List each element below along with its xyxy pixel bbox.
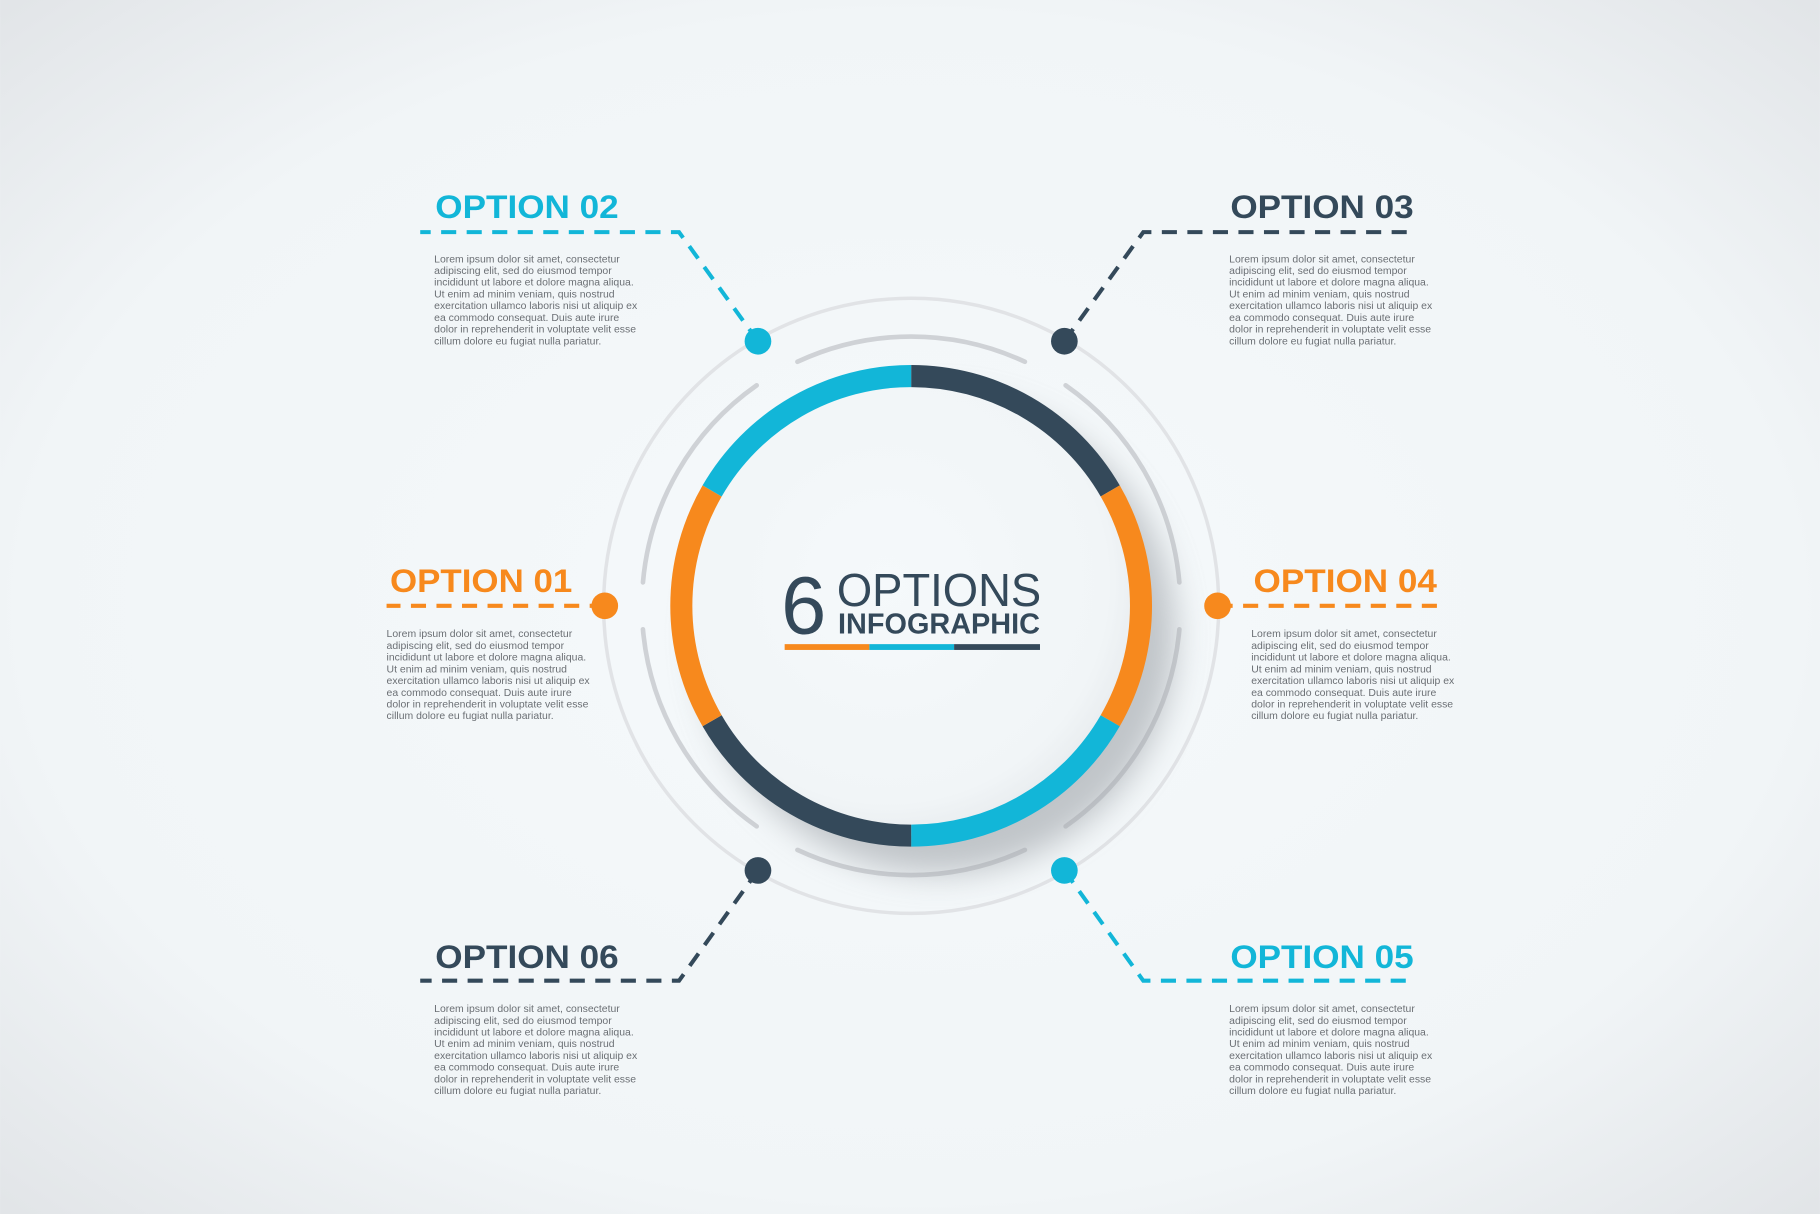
option 01: Ut enim ad minim veniam, quis nostrud: [387, 664, 567, 675]
option 02: [434, 189, 638, 347]
center title: INFOGRAPHIC: [838, 609, 1040, 641]
option 04: cillum dolore eu fugiat nulla pariatur.: [1251, 711, 1418, 722]
option 05: Lorem ipsum dolor sit amet, consectetur: [1229, 1004, 1415, 1015]
center title: OPTIONS: [837, 564, 1041, 616]
option 06: Lorem ipsum dolor sit amet, consectetur: [434, 1004, 620, 1015]
option 06: incididunt ut labore et dolore magna aliqua.: [434, 1027, 634, 1038]
option 04: adipiscing elit, sed do eiusmod tempor: [1251, 641, 1429, 652]
option 06: Ut enim ad minim veniam, quis nostrud: [434, 1039, 615, 1050]
option 01: Lorem ipsum dolor sit amet, consectetur: [387, 629, 573, 640]
option 03: cillum dolore eu fugiat nulla pariatur.: [1229, 336, 1396, 347]
option 05: incididunt ut labore et dolore magna aliqua.: [1229, 1027, 1429, 1038]
option 03: Ut enim ad minim veniam, quis nostrud: [1229, 289, 1410, 300]
option 03: dolor in reprehenderit in voluptate velit esse: [1229, 325, 1431, 336]
option 06: ea commodo consequat. Duis aute irure: [434, 1063, 619, 1074]
option 02: ea commodo consequat. Duis aute irure: [434, 313, 619, 324]
option 03: incididunt ut labore et dolore magna aliqua.: [1229, 278, 1429, 289]
option 03: ea commodo consequat. Duis aute irure: [1229, 313, 1414, 324]
option 03: [1229, 189, 1433, 347]
option 02: exercitation ullamco laboris nisi ut aliquip ex: [434, 301, 638, 312]
option 04: incididunt ut labore et dolore magna aliqua.: [1251, 653, 1451, 664]
option 05: adipiscing elit, sed do eiusmod tempor: [1229, 1016, 1407, 1027]
option 02: OPTION 02: [435, 189, 619, 225]
option 01: adipiscing elit, sed do eiusmod tempor: [387, 641, 565, 652]
option 03: adipiscing elit, sed do eiusmod tempor: [1229, 266, 1407, 277]
option 04: OPTION 04: [1254, 563, 1437, 599]
option 02: Lorem ipsum dolor sit amet, consectetur: [434, 254, 620, 265]
option 06: [434, 939, 638, 1097]
option 01: exercitation ullamco laboris nisi ut aliquip ex: [387, 676, 590, 687]
option 01: cillum dolore eu fugiat nulla pariatur.: [387, 711, 554, 722]
option 06: OPTION 06: [435, 939, 619, 975]
middle arcs: [643, 337, 1179, 875]
option 02: cillum dolore eu fugiat nulla pariatur.: [434, 336, 601, 347]
option 06: dolor in reprehenderit in voluptate velit esse: [434, 1074, 636, 1085]
option 06: cillum dolore eu fugiat nulla pariatur.: [434, 1086, 601, 1097]
option 03: Lorem ipsum dolor sit amet, consectetur: [1229, 254, 1415, 265]
option 02: dolor in reprehenderit in voluptate velit esse: [434, 325, 636, 336]
option 02: adipiscing elit, sed do eiusmod tempor: [434, 266, 612, 277]
option 01: dolor in reprehenderit in voluptate velit esse: [387, 700, 589, 711]
option 03: OPTION 03: [1230, 189, 1414, 225]
option 01: [387, 563, 590, 722]
option 06: adipiscing elit, sed do eiusmod tempor: [434, 1016, 612, 1027]
option 04: [1251, 563, 1455, 722]
option 04: Lorem ipsum dolor sit amet, consectetur: [1251, 629, 1437, 640]
option 05: [1229, 939, 1433, 1097]
center title: 6: [781, 561, 826, 652]
option 06: exercitation ullamco laboris nisi ut aliquip ex: [434, 1051, 638, 1062]
main segmented ring: [681, 376, 1141, 836]
option 05: cillum dolore eu fugiat nulla pariatur.: [1229, 1086, 1396, 1097]
option 01: OPTION 01: [390, 563, 572, 599]
option 04: exercitation ullamco laboris nisi ut aliquip ex: [1251, 676, 1455, 687]
option 05: ea commodo consequat. Duis aute irure: [1229, 1063, 1414, 1074]
outer ring: [604, 298, 1219, 913]
option 05: dolor in reprehenderit in voluptate velit esse: [1229, 1074, 1431, 1085]
option 05: OPTION 05: [1230, 939, 1414, 975]
option 02: incididunt ut labore et dolore magna aliqua.: [434, 278, 634, 289]
option 01: incididunt ut labore et dolore magna aliqua.: [387, 653, 586, 664]
option 02: Ut enim ad minim veniam, quis nostrud: [434, 289, 615, 300]
option 04: dolor in reprehenderit in voluptate velit esse: [1251, 700, 1453, 711]
ring shadow: [700, 398, 1176, 874]
option 05: exercitation ullamco laboris nisi ut aliquip ex: [1229, 1051, 1433, 1062]
dots: [591, 328, 1231, 884]
option 04: Ut enim ad minim veniam, quis nostrud: [1251, 664, 1432, 675]
connectors: [387, 232, 1439, 981]
option 04: ea commodo consequat. Duis aute irure: [1251, 688, 1436, 699]
option 01: ea commodo consequat. Duis aute irure: [387, 688, 572, 699]
option 03: exercitation ullamco laboris nisi ut aliquip ex: [1229, 301, 1433, 312]
center title: [781, 561, 1041, 652]
option 05: Ut enim ad minim veniam, quis nostrud: [1229, 1039, 1410, 1050]
